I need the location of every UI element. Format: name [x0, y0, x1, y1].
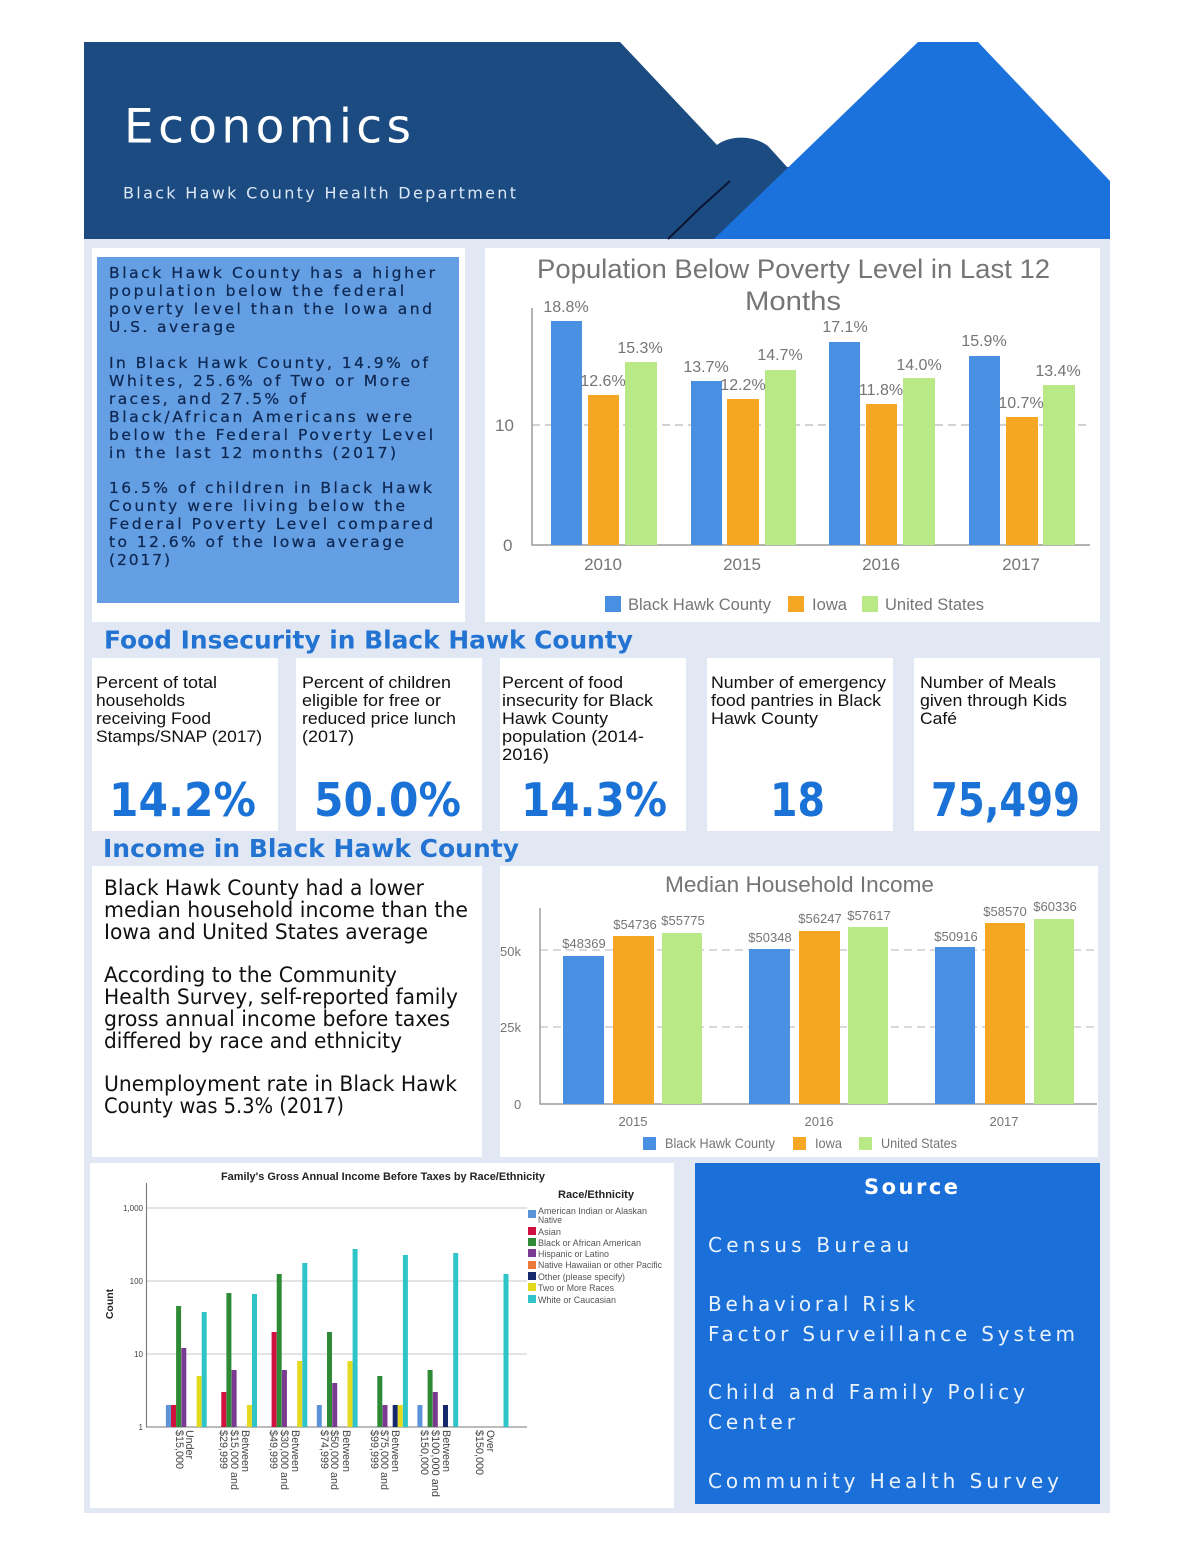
- text block: poverty facts: (2017): [109, 551, 170, 569]
- axis labels: 2015: [723, 555, 761, 574]
- value labels: 15.9%: [961, 333, 1007, 350]
- stat card: food insecurity: [500, 658, 686, 831]
- text block: poverty facts: to 12.6% of the Iowa average: [109, 533, 404, 551]
- bars: 2015: [563, 933, 702, 1104]
- value labels: $48369: [562, 936, 606, 951]
- legend: race and ethnicity: Hispanic or Latino: [538, 1249, 609, 1259]
- panel: income text: differed by race and ethnicity: [104, 1029, 402, 1053]
- value labels: 15.3%: [617, 340, 663, 357]
- x axis labels: $150,000: [473, 1430, 485, 1475]
- bars: $30,000 to $49,999: [272, 1263, 307, 1427]
- stat card: food stamps: [92, 658, 278, 831]
- stat card: Kids Cafe meals: [914, 658, 1100, 831]
- bars: 2016: [749, 927, 888, 1104]
- stat card: free or reduced lunch: eligible for free or: [302, 691, 441, 710]
- chart title: Population Below Poverty Level in Last 12: [537, 254, 1050, 284]
- value labels: $56247: [798, 911, 842, 926]
- legend: race and ethnicity: American Indian or Alaskan: [538, 1206, 647, 1216]
- x axis labels: $30,000 and: [278, 1430, 290, 1490]
- y axis labels: 10: [134, 1350, 144, 1359]
- stat card: food insecurity: Percent of food: [502, 673, 623, 692]
- value labels: 12.2%: [720, 377, 766, 394]
- value labels: 14.0%: [896, 357, 942, 374]
- chart title: Median Household Income: [665, 872, 934, 897]
- x axis labels: $99,999: [368, 1430, 380, 1469]
- bars: 2010: [551, 321, 657, 545]
- header accent stroke: [668, 181, 730, 239]
- value labels: $60336: [1033, 899, 1077, 914]
- bars: 2015: [691, 370, 796, 545]
- stat card: free or reduced lunch: Percent of children: [302, 673, 451, 692]
- y axis labels: 1: [139, 1423, 144, 1432]
- text block: poverty facts: County were living below the: [109, 497, 405, 515]
- axis labels: [495, 416, 1040, 574]
- bars: 2016: [829, 342, 935, 545]
- x axis labels: Over: [484, 1430, 496, 1452]
- stat card: Kids Cafe meals: Café: [920, 709, 957, 728]
- axis labels: 2016: [805, 1114, 833, 1129]
- bars: $100,000 to $150,000: [417, 1253, 458, 1427]
- axis labels: [500, 944, 1018, 1129]
- legend: race and ethnicity: Asian: [538, 1227, 561, 1237]
- axis labels: 50k: [500, 944, 521, 959]
- x axis labels: Between: [389, 1430, 401, 1472]
- value labels: $55775: [661, 913, 705, 928]
- y axis labels: [123, 1204, 144, 1432]
- bars: under $15,000: [166, 1306, 207, 1427]
- header shape: bright blue: [714, 42, 1110, 239]
- x axis labels: [173, 1430, 496, 1497]
- axis labels: 2015: [619, 1114, 647, 1129]
- chart title: Family's Gross Annual Income Before Taxes by Race/Ethnicity: [221, 1171, 546, 1183]
- source list: [708, 1233, 1075, 1493]
- axis labels: 2017: [990, 1114, 1018, 1129]
- x axis labels: Between: [340, 1430, 352, 1472]
- axis labels: 10: [495, 416, 514, 435]
- legend: race and ethnicity: Native: [538, 1215, 562, 1225]
- axis labels: 25k: [500, 1020, 521, 1035]
- stat card: emergency food pantries: Number of emergency: [711, 673, 887, 692]
- x axis labels: $29,999: [217, 1430, 229, 1469]
- text block: poverty facts: U.S. average: [109, 318, 235, 336]
- text block: poverty facts: Whites, 25.6% of Two or More: [109, 372, 410, 390]
- stat card: food stamps: 14.2%: [109, 773, 256, 827]
- panel: income text: median household income than the: [104, 898, 468, 922]
- source list: Child and Family Policy: [708, 1380, 1025, 1404]
- value labels: $58570: [983, 904, 1027, 919]
- panel: median household income chart: [500, 866, 1098, 1157]
- legend: Iowa: [815, 1135, 842, 1151]
- text block: poverty facts: below the Federal Poverty Level: [109, 426, 433, 444]
- header banner: [84, 42, 1110, 239]
- panel: poverty summary: [92, 248, 465, 622]
- source list: Behavioral Risk: [708, 1292, 915, 1316]
- stat card: free or reduced lunch: 50.0%: [314, 773, 461, 827]
- text block: poverty facts: Black Hawk County has a higher: [109, 264, 436, 282]
- source list: Census Bureau: [708, 1233, 909, 1257]
- text block: poverty facts: In Black Hawk County, 14.9% of: [109, 354, 429, 372]
- value labels: 11.8%: [859, 382, 903, 399]
- bars: $75,000 to $99,999: [377, 1255, 408, 1427]
- value labels: $57617: [847, 908, 891, 923]
- stat card: food insecurity: insecurity for Black: [502, 691, 654, 710]
- x axis labels: $15,000 and: [228, 1430, 240, 1490]
- text block: poverty facts: Black/African Americans were: [109, 408, 412, 426]
- x axis labels: $15,000: [173, 1430, 185, 1469]
- stat card: free or reduced lunch: [296, 658, 482, 831]
- value labels: 14.7%: [757, 347, 803, 364]
- chart title: [537, 254, 1050, 316]
- text block: poverty facts: Federal Poverty Level compared: [109, 515, 433, 533]
- legend: race and ethnicity: Two or More Races: [538, 1283, 614, 1293]
- legend: race and ethnicity: [528, 1189, 662, 1305]
- stat card: food insecurity: 14.3%: [521, 773, 667, 827]
- stat card: Kids Cafe meals: Number of Meals: [920, 673, 1056, 692]
- x axis labels: $100,000 and: [429, 1430, 441, 1497]
- stat card: food stamps: receiving Food: [96, 709, 211, 728]
- bars: $15,000 to $29,999: [221, 1293, 257, 1427]
- value labels: 13.4%: [1035, 363, 1081, 380]
- text block: poverty facts: 16.5% of children in Black Hawk: [109, 479, 432, 497]
- axis labels: 0: [514, 1097, 521, 1112]
- stat card: food insecurity: population (2014-: [502, 727, 644, 746]
- stat card: food insecurity: 2016): [502, 745, 549, 764]
- panel: income text: Unemployment rate in Black Hawk: [104, 1072, 458, 1096]
- header shape: dark blue: [84, 42, 792, 239]
- stat card: emergency food pantries: [707, 658, 893, 831]
- legend: United States: [885, 595, 984, 614]
- panel: income text: Iowa and United States average: [104, 920, 428, 944]
- subtitle: Black Hawk County Health Department: [123, 184, 516, 202]
- legend: United States: [881, 1135, 957, 1151]
- stat card: Kids Cafe meals: given through Kids: [920, 691, 1067, 710]
- panel: income by race chart: [90, 1163, 674, 1508]
- heading: food insecurity: Food Insecurity in Black Hawk County: [104, 626, 633, 654]
- legend: race and ethnicity: White or Caucasian: [538, 1295, 616, 1305]
- heading: source: Source: [864, 1175, 958, 1199]
- stat card: food stamps: households: [96, 691, 185, 710]
- y axis labels: 1,000: [123, 1204, 144, 1213]
- y axis labels: 100: [130, 1277, 144, 1286]
- x axis labels: $49,999: [267, 1430, 279, 1469]
- panel: poverty bar chart: [485, 248, 1100, 622]
- stat card: food stamps: Percent of total: [96, 673, 217, 692]
- x axis labels: Between: [239, 1430, 251, 1472]
- bars: $50,000 to $74,999: [317, 1249, 358, 1427]
- axis labels: 2017: [1002, 555, 1040, 574]
- panel: income text: Black Hawk County had a lower: [104, 876, 424, 900]
- panel: income text: Health Survey, self-reported family: [104, 985, 458, 1009]
- bars: over $150,000: [504, 1274, 508, 1427]
- text block: poverty facts: population below the federal: [109, 282, 404, 300]
- stat card: emergency food pantries: food pantries in Black: [711, 691, 882, 710]
- stat card: free or reduced lunch: (2017): [302, 727, 354, 746]
- value labels: 17.1%: [822, 319, 868, 336]
- legend: Black Hawk County: [628, 595, 771, 614]
- value labels: [543, 299, 1081, 412]
- value labels: 13.7%: [683, 359, 729, 376]
- x axis labels: $74,999: [318, 1430, 330, 1469]
- stat card: free or reduced lunch: reduced price lunch: [302, 709, 456, 728]
- text block: poverty facts: poverty level than the Iowa and: [109, 300, 432, 318]
- x axis labels: Between: [440, 1430, 452, 1472]
- value labels: 10.7%: [998, 395, 1044, 412]
- panel: income text: County was 5.3% (2017): [104, 1094, 344, 1118]
- stat card: emergency food pantries: Hawk County: [711, 709, 819, 728]
- bars: 2017: [969, 356, 1075, 545]
- source list: Factor Surveillance System: [708, 1322, 1075, 1346]
- value labels: $50916: [934, 929, 978, 944]
- value labels: $50348: [748, 930, 792, 945]
- stat card: food stamps: Stamps/SNAP (2017): [96, 727, 262, 746]
- text block: poverty facts: races, and 27.5% of: [109, 390, 307, 408]
- legend: race and ethnicity: Native Hawaiian or other Pacific: [538, 1260, 662, 1270]
- x axis labels: Between: [289, 1430, 301, 1472]
- source list: Community Health Survey: [708, 1469, 1059, 1493]
- value labels: 18.8%: [543, 299, 589, 316]
- value labels: 12.6%: [580, 373, 626, 390]
- heading: income: Income in Black Hawk County: [103, 834, 519, 863]
- text block: poverty facts: in the last 12 months (2017): [109, 444, 396, 462]
- axis labels: 0: [503, 536, 512, 555]
- stat card: emergency food pantries: 18: [770, 773, 825, 827]
- x axis labels: Under: [183, 1430, 195, 1459]
- x axis labels: $50,000 and: [328, 1430, 340, 1490]
- source list: Center: [708, 1410, 796, 1434]
- text block: poverty facts: [109, 264, 436, 569]
- legend: race and ethnicity: Other (please specify): [538, 1272, 625, 1282]
- legend: [643, 1135, 957, 1151]
- stat card: Kids Cafe meals: 75,499: [931, 773, 1080, 827]
- x axis labels: $150,000: [418, 1430, 430, 1475]
- legend: race and ethnicity: Race/Ethnicity: [558, 1189, 635, 1201]
- legend: Black Hawk County: [665, 1135, 775, 1151]
- y axis title: Count: [104, 1288, 116, 1319]
- panel: income text: gross annual income before taxes: [104, 1007, 450, 1031]
- axis labels: 2016: [862, 555, 900, 574]
- panel: income text: According to the Community: [104, 963, 397, 987]
- axis labels: 2010: [584, 555, 622, 574]
- value labels: $54736: [613, 917, 657, 932]
- title: Economics: [124, 100, 411, 154]
- legend: race and ethnicity: Black or African American: [538, 1238, 641, 1248]
- panel: income text: [92, 866, 482, 1157]
- chart title: Months: [745, 286, 841, 316]
- legend: Iowa: [812, 595, 848, 614]
- stat card: food insecurity: Hawk County: [502, 709, 609, 728]
- legend: [605, 595, 984, 614]
- x axis labels: $75,000 and: [378, 1430, 390, 1490]
- bars: 2017: [935, 919, 1074, 1104]
- panel: sources: [695, 1163, 1100, 1504]
- value labels: [562, 899, 1077, 951]
